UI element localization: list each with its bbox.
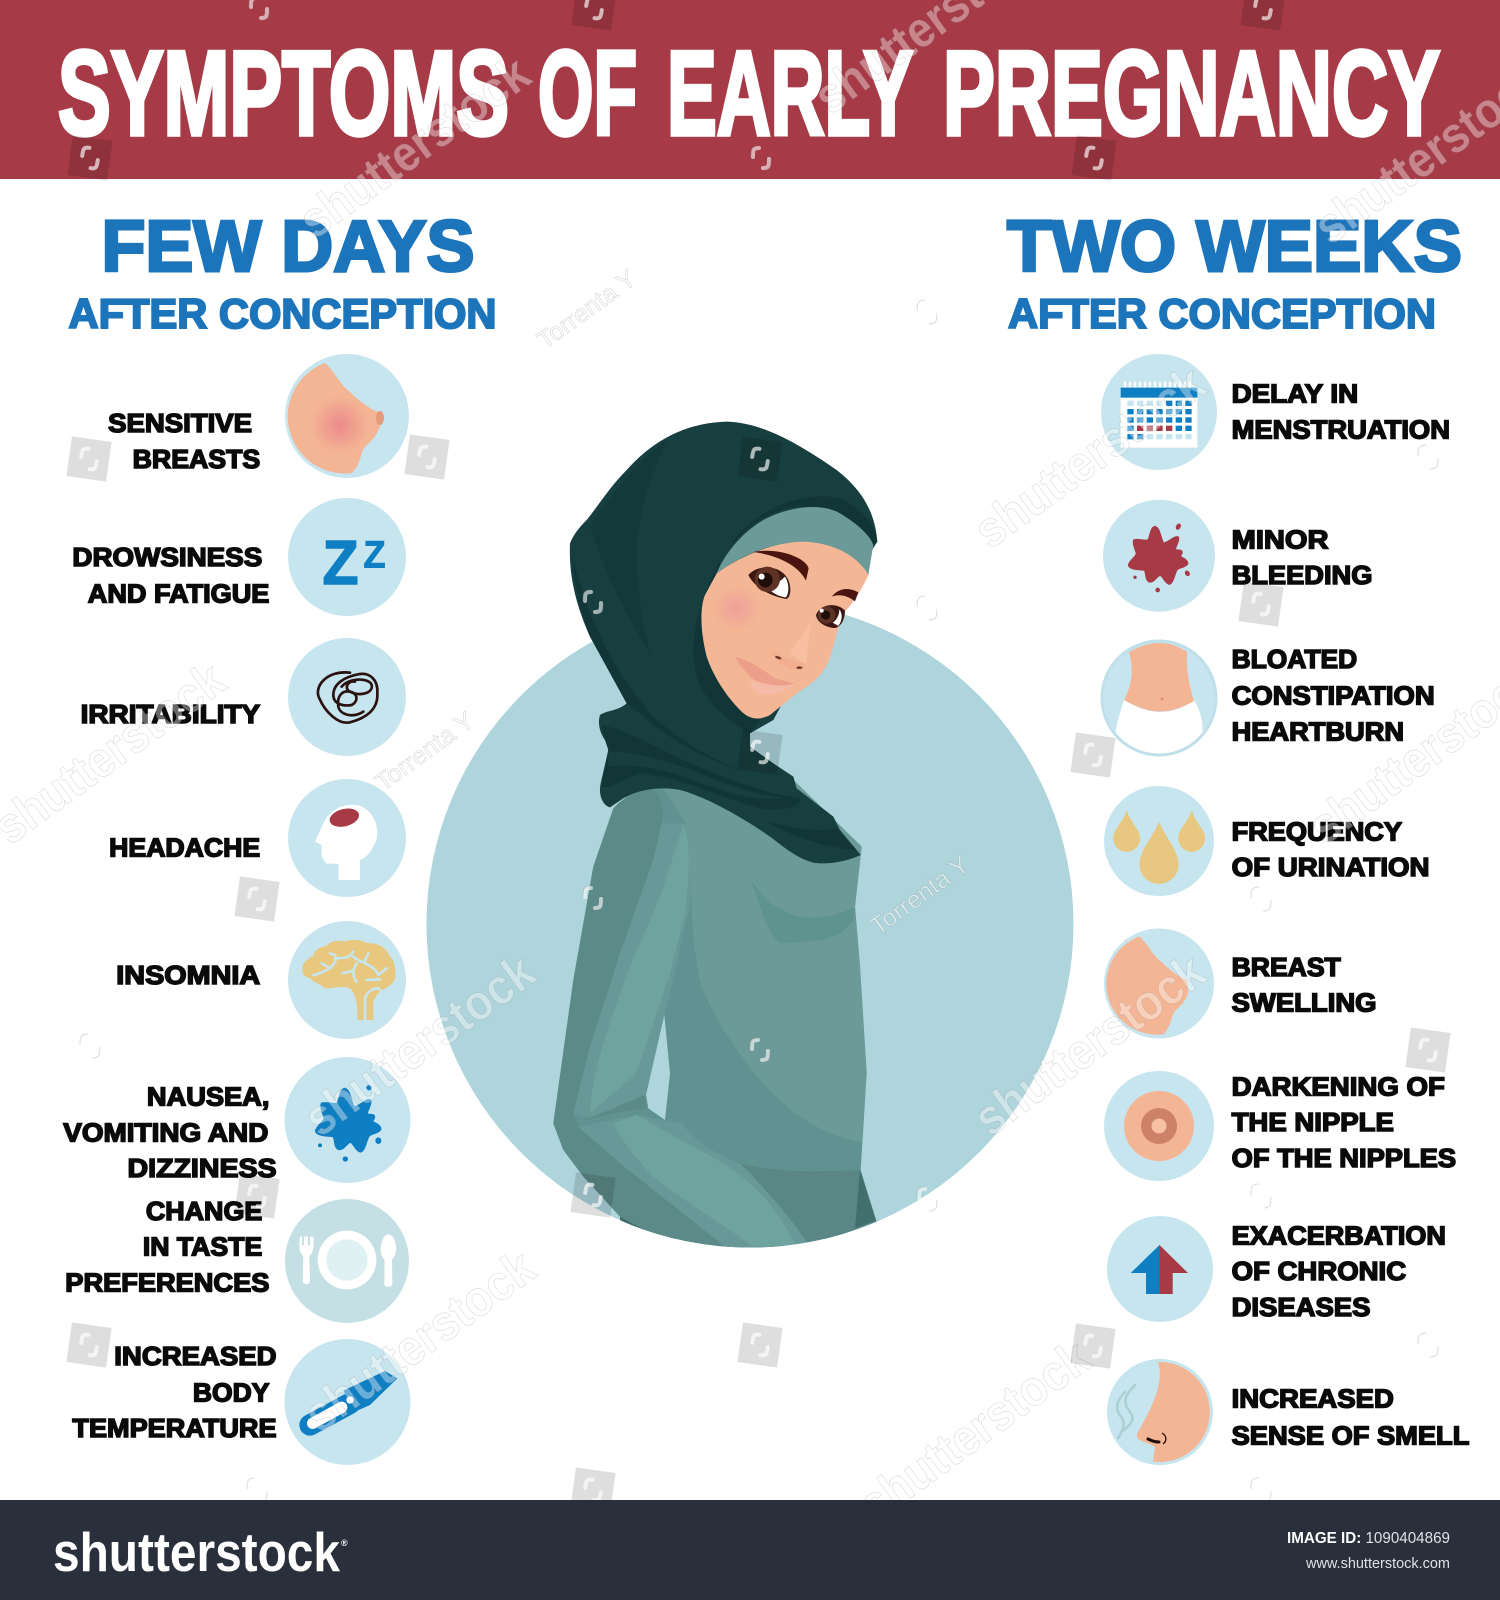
heading: few days after conception	[68, 207, 496, 337]
label: delay in menstruation: MENSTRUATION	[1232, 414, 1450, 444]
watermark overlay: shutterstock	[964, 943, 1215, 1147]
icon: sleep Zz: Z	[364, 534, 386, 576]
woman figure	[553, 422, 877, 1280]
label: drowsiness and fatigue: AND FATIGUE	[88, 579, 269, 609]
label: taste	[65, 1196, 269, 1297]
label: bloated: BLOATED	[1232, 644, 1357, 674]
label: temperature: BODY	[193, 1378, 269, 1408]
label: drowsiness and fatigue: DROWSINESS	[72, 542, 262, 572]
label: bloated: CONSTIPATION	[1232, 681, 1435, 711]
label: exacerbation	[1232, 1220, 1446, 1322]
watermark overlay: shutterstock	[964, 355, 1215, 559]
icon: insomnia brain	[288, 921, 406, 1039]
label: delay in menstruation: DELAY IN	[1232, 379, 1358, 409]
label: temperature: TEMPERATURE	[72, 1413, 277, 1443]
watermark overlay: shutterstock	[294, 943, 545, 1147]
icon: irritability scribble	[288, 638, 406, 756]
icon: thermometer	[284, 1339, 410, 1465]
heading: few days after conception: FEW DAYS	[102, 207, 474, 287]
label: exacerbation: DISEASES	[1232, 1292, 1370, 1322]
label: headache: HEADACHE	[109, 833, 260, 863]
label: sensitive breasts: SENSITIVE	[108, 408, 252, 438]
icon: sleep Zz: Z	[322, 529, 358, 598]
title	[58, 26, 1440, 160]
label: exacerbation: OF CHRONIC	[1232, 1256, 1406, 1286]
label: taste: IN TASTE	[143, 1232, 262, 1262]
label: darkening: THE NIPPLE	[1232, 1107, 1394, 1137]
labels: few days column	[63, 408, 277, 1443]
label: delay in menstruation	[1232, 379, 1450, 444]
watermark overlay: Torrenta Y	[865, 850, 975, 941]
label: breast swelling	[1232, 952, 1377, 1018]
watermark overlay: shutterstock	[294, 1239, 545, 1443]
icon: urine drops	[1104, 786, 1214, 896]
icon: nose and smell	[1107, 1359, 1213, 1465]
label: minor bleeding	[1232, 524, 1372, 590]
heading: two weeks after conception: AFTER CONCEPTION	[1008, 290, 1436, 337]
title: SYMPTOMS	[58, 26, 509, 160]
label: bloated: HEARTBURN	[1232, 716, 1404, 746]
label: temperature	[72, 1341, 277, 1443]
label: drowsiness and fatigue	[72, 542, 269, 609]
footer image id	[1287, 1530, 1450, 1572]
label: smell: INCREASED	[1232, 1384, 1394, 1414]
label: taste: PREFERENCES	[65, 1267, 269, 1297]
heading: few days after conception: AFTER CONCEPTION	[68, 290, 496, 337]
sweater body	[553, 773, 877, 1280]
label: minor bleeding: BLEEDING	[1232, 560, 1372, 590]
label: nausea: VOMITING AND	[63, 1117, 268, 1147]
heading: two weeks after conception: TWO WEEKS	[1007, 207, 1462, 287]
label: darkening	[1232, 1071, 1456, 1173]
icon: nausea splash	[284, 1057, 410, 1183]
header banner	[0, 0, 1500, 179]
footer logo: shutterstock	[53, 1521, 340, 1583]
icon: breast swelling	[1104, 928, 1214, 1038]
heading: two weeks after conception	[1007, 207, 1462, 337]
icon: plate and cutlery	[285, 1199, 409, 1323]
gap between arm and torso	[646, 1015, 670, 1120]
label: taste: CHANGE	[146, 1196, 262, 1226]
label: exacerbation: EXACERBATION	[1232, 1220, 1446, 1250]
footer logo: ®	[341, 1538, 348, 1548]
label: minor bleeding: MINOR	[1232, 524, 1329, 554]
icon: up arrow	[1107, 1216, 1213, 1322]
label: darkening: DARKENING OF	[1232, 1071, 1445, 1101]
eyebrows	[753, 551, 809, 581]
central circle	[426, 600, 1074, 1248]
footer image id: IMAGE ID: 1090404869	[1287, 1530, 1450, 1547]
icon: calendar	[1101, 354, 1217, 470]
label: irritability: IRRITABILITY	[81, 699, 260, 729]
icon: headache	[288, 779, 406, 897]
label: urination: OF URINATION	[1232, 852, 1430, 882]
label: sensitive breasts: BREASTS	[133, 444, 260, 474]
label: nausea: NAUSEA,	[147, 1082, 269, 1112]
label: urination: FREQUENCY	[1232, 816, 1402, 846]
icon: sleep Zz	[288, 498, 406, 616]
label: smell	[1232, 1384, 1469, 1450]
label: nausea	[63, 1082, 277, 1183]
eyes	[748, 567, 790, 599]
label: sensitive breasts	[108, 408, 260, 474]
label: temperature: INCREASED	[114, 1341, 277, 1371]
icon: blood splat	[1103, 500, 1215, 612]
watermark overlay: Torrenta Y	[370, 706, 480, 797]
watermark overlay: Torrenta Y	[532, 264, 642, 355]
label: smell: SENSE OF SMELL	[1232, 1420, 1469, 1450]
title: OF	[538, 26, 637, 160]
hijab and face	[570, 422, 877, 863]
icon: sensitive breasts	[285, 354, 409, 478]
label: insomnia: INSOMNIA	[116, 960, 260, 990]
icon: bloated belly	[1101, 640, 1217, 770]
label: urination	[1232, 816, 1430, 882]
label: nausea: DIZZINESS	[128, 1153, 277, 1183]
label: darkening: OF THE NIPPLES	[1232, 1143, 1456, 1173]
footer bar	[0, 1500, 1500, 1600]
label: bloated	[1232, 644, 1435, 746]
footer image id: www.shutterstock.com	[1305, 1556, 1450, 1572]
label: breast swelling: BREAST	[1232, 952, 1341, 982]
label: breast swelling: SWELLING	[1232, 988, 1377, 1018]
labels: two weeks column	[1232, 379, 1469, 1450]
watermark overlay: shutterstock	[289, 45, 540, 249]
title: EARLY	[667, 26, 913, 160]
watermark overlay: shutterstock	[849, 1329, 1100, 1533]
lips	[750, 679, 795, 695]
icon: darkened nipple	[1104, 1071, 1214, 1181]
